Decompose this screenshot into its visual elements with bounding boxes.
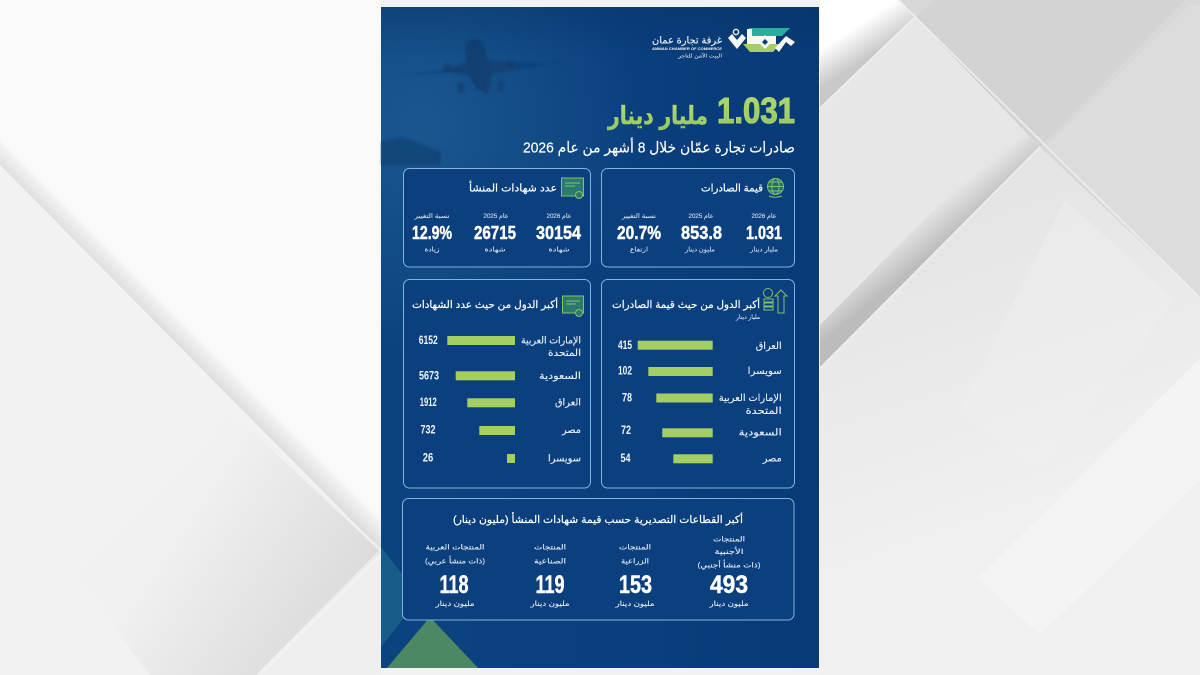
stat: foreign products: المنتجات bbox=[713, 535, 745, 544]
stat: Arab products: المنتجات العربية bbox=[426, 542, 484, 551]
title: headline figure bbox=[606, 90, 795, 131]
logo mark bbox=[728, 28, 795, 52]
stat: 2025 certificates: 26715 bbox=[474, 222, 516, 243]
bar chart: certificates by country: 26 bbox=[423, 453, 433, 465]
logo Arabic name: غرفة تجارة عمان bbox=[652, 36, 722, 46]
bar chart: certificates by country: 6152 bbox=[419, 335, 438, 347]
panel: top countries by certificates bbox=[404, 280, 590, 488]
stat: change rate: ارتفاع bbox=[630, 246, 648, 254]
stat: industrial products bbox=[529, 542, 570, 608]
panel: main infographic poster bbox=[381, 7, 819, 668]
stat: 2026 value: مليار دينار bbox=[749, 246, 778, 254]
logo English name: AMMAN CHAMBER OF COMMERCE bbox=[652, 47, 723, 51]
stat: 2025 certificates bbox=[474, 213, 516, 254]
stat: change rate: نسبة التغيير bbox=[621, 213, 656, 220]
bar chart: certificates by country: سويسرا bbox=[548, 454, 581, 465]
stat: industrial products: الصناعية bbox=[534, 556, 566, 565]
stat: 2026 certificates: 30154 bbox=[536, 222, 582, 243]
stat: Arab products: (ذات منشأ عربي) bbox=[425, 555, 486, 565]
bar chart: export value by country: 102 bbox=[618, 366, 632, 378]
panel: export value bbox=[602, 168, 794, 267]
stat: agricultural products: المنتجات bbox=[619, 542, 651, 551]
logo tagline: البيت الآمن للتاجر bbox=[677, 52, 723, 60]
bar chart: export value by country: 72 bbox=[621, 425, 631, 437]
bar chart: certificates by country: 1912 bbox=[420, 397, 437, 409]
heading: export value: قيمة الصادرات bbox=[701, 182, 763, 194]
stat: certificates change: نسبة التغيير bbox=[413, 213, 450, 220]
heading: certificates: عدد شهادات المنشأ bbox=[469, 180, 557, 194]
bar chart: export value by country: 78 bbox=[622, 393, 632, 405]
title: headline figure: مليار دينار bbox=[606, 102, 708, 130]
stat: 2026 value: 1.031 bbox=[746, 222, 782, 243]
stat: foreign products: مليون دينار bbox=[708, 599, 748, 608]
decoration: green triangle bbox=[387, 617, 478, 668]
stat: 2026 certificates: عام 2026 bbox=[546, 213, 572, 220]
bar chart: export value by country: 415 bbox=[618, 340, 632, 352]
bar chart: certificates by country: الإمارات العربية bbox=[521, 335, 581, 346]
bar chart: certificates by country: السعودية bbox=[539, 371, 581, 382]
bar chart: certificates by country: 732 bbox=[420, 424, 436, 436]
panel: number of certificates of origin bbox=[404, 168, 590, 267]
icon: coins and arrow bbox=[764, 288, 787, 313]
bar chart: export value by country bbox=[618, 340, 782, 465]
stat: 2025 value: مليون دينار bbox=[684, 246, 715, 254]
stat: change rate: 20.7% bbox=[617, 222, 661, 243]
stat: agricultural products: 153 bbox=[619, 571, 652, 599]
logo: Amman Chamber of Commerce bbox=[652, 28, 795, 60]
unit note: مليار دينار bbox=[735, 314, 760, 321]
stat: certificates change bbox=[412, 213, 452, 254]
stat: 2026 certificates bbox=[536, 213, 582, 254]
panel: top countries by export value bbox=[602, 280, 794, 488]
bar chart: certificates by country: 5673 bbox=[419, 370, 439, 382]
subtitle: صادرات تجارة عمّان خلال 8 أشهر من عام 2026 bbox=[523, 138, 795, 156]
bar chart: certificates by country: المتحدة bbox=[548, 348, 581, 359]
heading: top sectors: أكبر القطاعات التصديرية حسب قيمة شهادات المنشأ (مليون دينار) bbox=[453, 512, 743, 526]
bar chart: export value by country: مصر bbox=[762, 454, 782, 465]
icon: globe bbox=[768, 178, 784, 197]
stat: agricultural products: مليون دينار bbox=[614, 599, 654, 608]
bar chart: export value by country: سويسرا bbox=[748, 366, 782, 377]
stat: certificates change: زيادة bbox=[424, 246, 440, 254]
bar chart: export value by country: المتحدة bbox=[746, 406, 782, 417]
stat: industrial products: المنتجات bbox=[534, 542, 566, 551]
stat: foreign products bbox=[698, 535, 761, 608]
title: headline figure: 1.031 bbox=[717, 90, 795, 131]
stat: agricultural products bbox=[614, 542, 654, 608]
stat: 2026 value bbox=[746, 213, 782, 254]
bar chart: export value by country: الإمارات العربية bbox=[719, 393, 782, 404]
heading: top countries by value: أكبر الدول من حيث قيمة الصادرات bbox=[612, 297, 760, 311]
stat: 2026 certificates: شهادة bbox=[548, 246, 570, 254]
heading: top countries by certificates: أكبر الدول من حيث عدد الشهادات bbox=[412, 297, 558, 311]
icon: certificate bbox=[562, 178, 584, 198]
stat: Arab products: 118 bbox=[440, 571, 469, 599]
stat: 2025 value bbox=[681, 213, 722, 254]
stat: industrial products: 119 bbox=[536, 571, 564, 599]
stat: foreign products: الأجنبية bbox=[714, 546, 744, 556]
stat: 2026 value: عام 2026 bbox=[752, 213, 777, 220]
stat: agricultural products: الزراعية bbox=[621, 556, 649, 565]
stat: Arab products bbox=[425, 542, 486, 608]
stat: 2025 certificates: عام 2025 bbox=[484, 213, 509, 220]
stat: industrial products: مليون دينار bbox=[529, 599, 570, 608]
stat: Arab products: مليون دينار bbox=[434, 599, 474, 608]
bar chart: export value by country: السعودية bbox=[739, 428, 782, 439]
stat: foreign products: (ذات منشأ أجنبي) bbox=[698, 559, 761, 569]
bar chart: certificates by country: مصر bbox=[561, 425, 581, 436]
stat: 2025 value: عام 2025 bbox=[688, 213, 714, 220]
stat: 2025 value: 853.8 bbox=[681, 222, 722, 243]
image: building silhouette bbox=[381, 137, 441, 165]
stat: foreign products: 493 bbox=[710, 571, 748, 599]
stat: 2025 certificates: شهادة bbox=[484, 246, 506, 254]
icon: certificate bbox=[562, 296, 584, 316]
bar chart: certificates by country: العراق bbox=[555, 398, 581, 409]
stat: change rate bbox=[617, 213, 661, 254]
decoration: teal triangle bbox=[381, 547, 420, 647]
bar chart: export value by country: العراق bbox=[756, 341, 782, 352]
bar chart: certificates by country bbox=[419, 335, 581, 465]
panel: top export sectors bbox=[402, 498, 794, 620]
stat: certificates change: 12.9% bbox=[412, 222, 452, 243]
image: airplane silhouette bbox=[396, 38, 569, 95]
bar chart: export value by country: 54 bbox=[620, 453, 631, 465]
